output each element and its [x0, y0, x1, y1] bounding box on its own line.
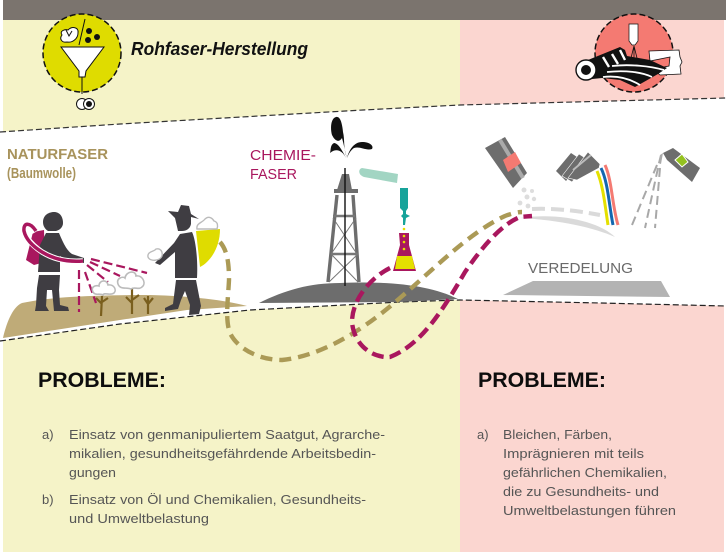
left problems panel [38, 369, 385, 526]
title: Rohfaser-Herstellung [131, 39, 308, 59]
icon: spray can [658, 148, 700, 182]
heading: Baumwolle: (Baumwolle) [7, 166, 76, 182]
heading: Naturfaser: NATURFASER [7, 147, 109, 163]
icon: raw fibre funnel [43, 14, 121, 110]
naturfaser process path [220, 212, 522, 360]
pale process path [532, 209, 600, 215]
oil gusher [330, 117, 373, 158]
upper dashed boundary [0, 98, 726, 132]
figure: farmer spraying [23, 212, 84, 311]
right problems panel [477, 369, 676, 518]
white middle band [0, 98, 726, 341]
list: left problems text: Einsatz von Öl und Chemikalien, Gesundheits- [69, 492, 366, 507]
burette [400, 188, 410, 225]
list: left problems text [42, 427, 385, 526]
chemiefaser process path [352, 216, 532, 357]
list: right problems text: die zu Gesundheits- und [503, 484, 659, 499]
spray lines [632, 165, 660, 228]
figure: farmer picking cotton [148, 205, 220, 315]
heading: Chemiefaser [250, 148, 316, 183]
cotton plants [92, 272, 153, 316]
ground: oil hill [259, 283, 458, 303]
list: right problems text: Bleichen, Färben, [503, 427, 612, 442]
veredelung ground shapes [503, 281, 670, 297]
list: left problems text: und Umweltbelastung [69, 511, 209, 526]
list: left problems text: b) [42, 492, 54, 507]
list: right problems text: Umweltbelastungen führen [503, 503, 676, 518]
list: right problems text: Imprägnieren mit teils [503, 446, 645, 461]
gray process swoosh [520, 216, 615, 237]
heading: Chemiefaser: FASER [250, 167, 297, 183]
oil derrick [328, 168, 359, 286]
heading: left Probleme: PROBLEME: [38, 369, 166, 392]
list: right problems text: gefährlichen Chemikalien, [503, 465, 667, 480]
dye streams [597, 165, 618, 225]
list: left problems text: gungen [69, 465, 116, 480]
test tube [359, 168, 398, 183]
panel: yellow background [3, 20, 460, 552]
list: left problems text: Einsatz von genmanipuliertem Saatgut, Agrarche- [69, 427, 385, 442]
icon: triple dye nozzle [556, 152, 600, 182]
list: right problems text: a) [477, 427, 489, 442]
heading: Chemiefaser: CHEMIE- [250, 148, 316, 164]
lower dashed boundary [0, 300, 726, 341]
spray dashes [79, 259, 147, 312]
icon: pink roller [485, 137, 527, 188]
list: left problems text: a) [42, 427, 54, 442]
flask [393, 228, 416, 271]
heading: right Probleme: PROBLEME: [478, 369, 606, 392]
dye particles [518, 188, 536, 208]
ground: naturfaser field [3, 295, 247, 338]
panel: pink background [460, 20, 724, 552]
top band [3, 0, 726, 20]
list: right problems text [477, 427, 676, 518]
heading: Veredelung: VEREDELUNG [528, 260, 633, 277]
list: left problems text: mikalien, gesundheitsgefährdende Arbeitsbedin- [69, 446, 376, 461]
icon: finishing circle with fabric roll and sewing machine [576, 14, 682, 92]
